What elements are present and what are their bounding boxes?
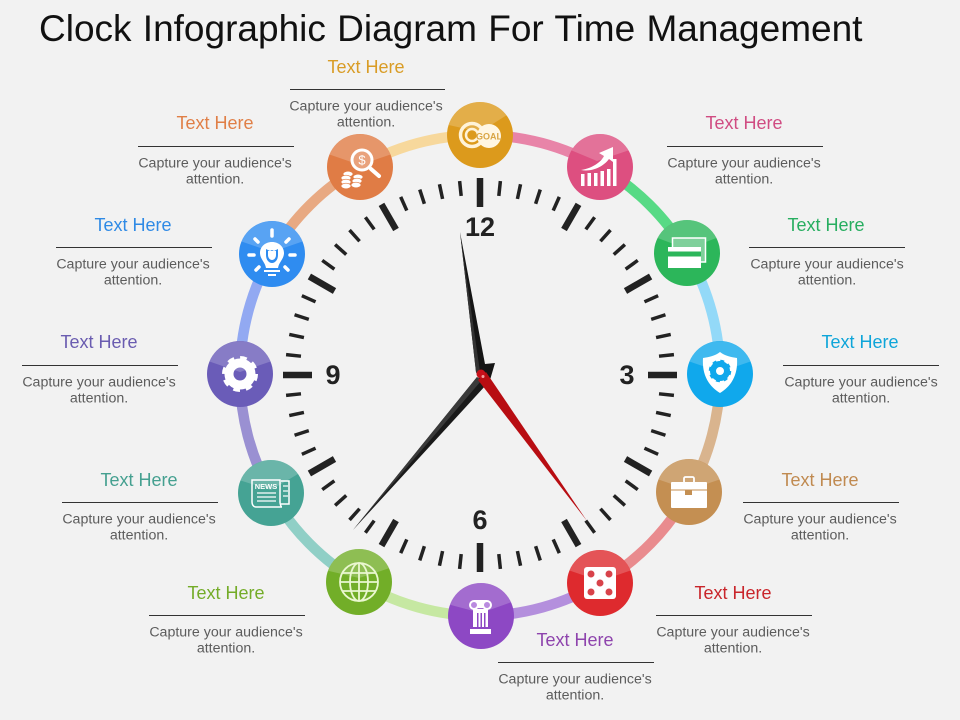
icon: goal target: GOAL [476,132,503,142]
clock numbers [325,212,635,535]
icon: security shield [687,341,753,407]
label: sky blue [783,332,939,406]
label: top gold: attention. [337,114,395,130]
label: tan: attention. [791,528,849,544]
label: pink [667,113,823,188]
label: orange: attention. [186,172,244,188]
icon: newspaper: NEWS [255,482,277,491]
label: blue [56,215,212,288]
label: indigo: attention. [70,390,128,406]
label: top gold [289,57,445,130]
label: green: attention. [798,272,856,288]
clock tick marks [283,178,677,572]
label: tan [743,470,899,544]
second hand [478,372,587,521]
label: blue: attention. [104,272,162,288]
label: blue: Text Here [94,215,172,235]
label: teal: Text Here [100,470,178,490]
label: sky blue: attention. [832,390,890,406]
icon: money search: $ [358,152,366,168]
label: orange: Capture your audience's [138,156,292,172]
icon: light bulb [239,221,305,287]
icon: goal target [447,102,513,168]
title: Clock Infographic Diagram For Time Management [39,8,863,49]
icon: dice [567,550,633,616]
label: red: Capture your audience's [656,624,810,640]
clock hands [353,232,587,530]
minute hand [353,377,486,530]
label: purple [498,630,654,704]
label: purple: attention. [546,688,604,704]
icon: gear [207,341,273,407]
icon: newspaper [238,460,304,526]
clock numbers: 9 [325,360,341,390]
label: top gold: Text Here [327,57,405,77]
label: pink: Text Here [705,113,783,133]
icon: column [448,583,514,649]
icon: money search [327,134,393,200]
label: teal [62,470,218,544]
label: purple: Text Here [536,630,614,650]
icon: growth chart [567,134,633,200]
label: pink: attention. [715,172,773,188]
label: sky blue: Text Here [821,332,899,352]
ring of coloured arcs [240,135,720,616]
label: pink: Capture your audience's [667,156,821,172]
label: orange: Text Here [176,113,254,133]
label: top gold: Capture your audience's [289,98,443,114]
label: lime: Text Here [187,583,265,603]
label: sky blue: Capture your audience's [784,374,938,390]
label: tan: Text Here [781,470,859,490]
label: tan: Capture your audience's [743,512,897,528]
label: green [749,215,905,288]
icon: globe [326,549,392,615]
icon: briefcase [656,459,722,525]
centre pin [476,370,486,378]
label: red: attention. [704,640,762,656]
label: green: Capture your audience's [750,256,904,272]
label: teal: attention. [110,528,168,544]
label: purple: Capture your audience's [498,672,652,688]
hour hand [460,232,495,386]
label: lime [149,583,305,656]
label: lime: Capture your audience's [149,624,303,640]
clock numbers: 3 [619,360,635,390]
label: blue: Capture your audience's [56,256,210,272]
label: green: Text Here [787,215,865,235]
clock numbers: 6 [472,505,488,535]
label: indigo: Text Here [60,332,138,352]
label: red [656,583,812,656]
icon: credit cards [654,220,720,286]
label: teal: Capture your audience's [62,512,216,528]
label: lime: attention. [197,640,255,656]
label: orange [138,113,294,188]
label: red: Text Here [694,583,772,603]
label: indigo [22,332,178,406]
label: indigo: Capture your audience's [22,374,176,390]
clock numbers: 12 [465,212,495,242]
